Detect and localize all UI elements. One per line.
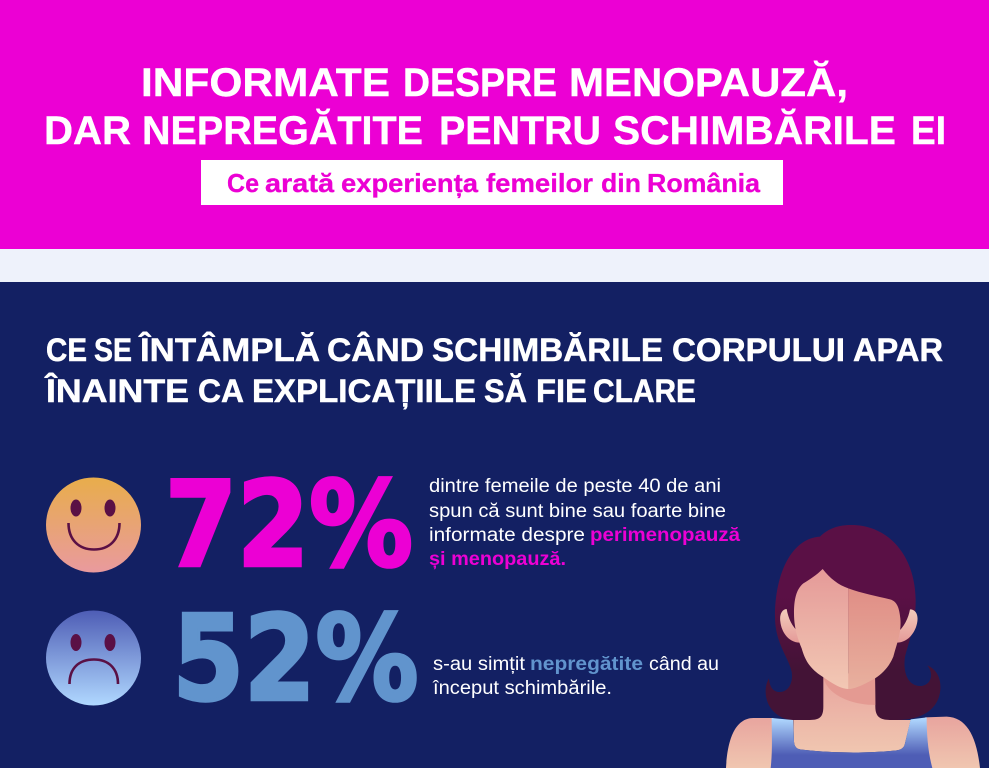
text: 72% description (429, 476, 740, 570)
text: 52% description: nepregătite (530, 654, 643, 675)
top (771, 717, 932, 768)
title: DAR (44, 109, 131, 153)
text: 72% description: dintre femeile de peste 40 de ani (429, 476, 721, 497)
panel: header background (0, 0, 989, 249)
title: EI (911, 109, 946, 153)
title: PENTRU (439, 109, 601, 153)
section heading: APAR (853, 332, 943, 368)
subtitle banner: arată (265, 168, 335, 198)
subtitle banner (201, 160, 783, 205)
subtitle banner: din (601, 168, 641, 198)
hair (766, 525, 940, 721)
stat: 52%: 52% (172, 589, 418, 727)
section heading: ÎNAINTE (44, 373, 189, 409)
text: 52% description: când au (649, 654, 719, 675)
section heading: CE (46, 332, 87, 368)
subtitle banner: Ce (227, 168, 259, 198)
title (44, 60, 946, 153)
title: INFORMATE (141, 61, 390, 105)
title: DESPRE (403, 61, 557, 105)
icon: sad face (46, 610, 141, 706)
panel: navy content background (0, 282, 989, 768)
section heading: FIE (536, 373, 587, 409)
icon: happy face (46, 478, 141, 572)
face (794, 569, 848, 689)
text: 72% description: spun că sunt bine sau foarte bine (429, 501, 726, 522)
section heading: SCHIMBĂRILE (432, 332, 663, 368)
illustration: woman portrait (726, 525, 980, 768)
neck (793, 673, 911, 753)
subtitle banner: femeilor (486, 168, 593, 198)
stat: 72%: 72% (165, 455, 413, 593)
title: NEPREGĂTITE (142, 108, 423, 153)
text: 52% description (432, 654, 719, 699)
title: SCHIMBĂRILE (613, 108, 896, 153)
subtitle banner: experiența (341, 168, 479, 198)
shoulders (726, 717, 980, 768)
text: 52% description: s-au simțit (433, 654, 526, 675)
ears (780, 609, 918, 643)
text: 72% description: informate despre (429, 525, 585, 546)
panel: light separator band (0, 249, 989, 282)
section heading: CA (198, 373, 244, 409)
text: 72% description: perimenopauză (590, 525, 740, 546)
section heading: ÎNTÂMPLĂ (138, 332, 320, 368)
section heading: SĂ (484, 373, 527, 409)
text: 72% description: și menopauză. (429, 549, 566, 570)
section heading: CORPULUI (672, 332, 845, 368)
section heading (44, 332, 943, 409)
title: MENOPAUZĂ, (569, 60, 848, 105)
subtitle banner: România (647, 168, 761, 198)
section heading: SE (94, 332, 132, 368)
section heading: EXPLICAȚIILE (252, 373, 476, 409)
section heading: CLARE (593, 373, 696, 409)
neck shadow (823, 675, 875, 705)
text: 52% description: început schimbările. (432, 678, 612, 699)
section heading: CÂND (327, 332, 424, 368)
